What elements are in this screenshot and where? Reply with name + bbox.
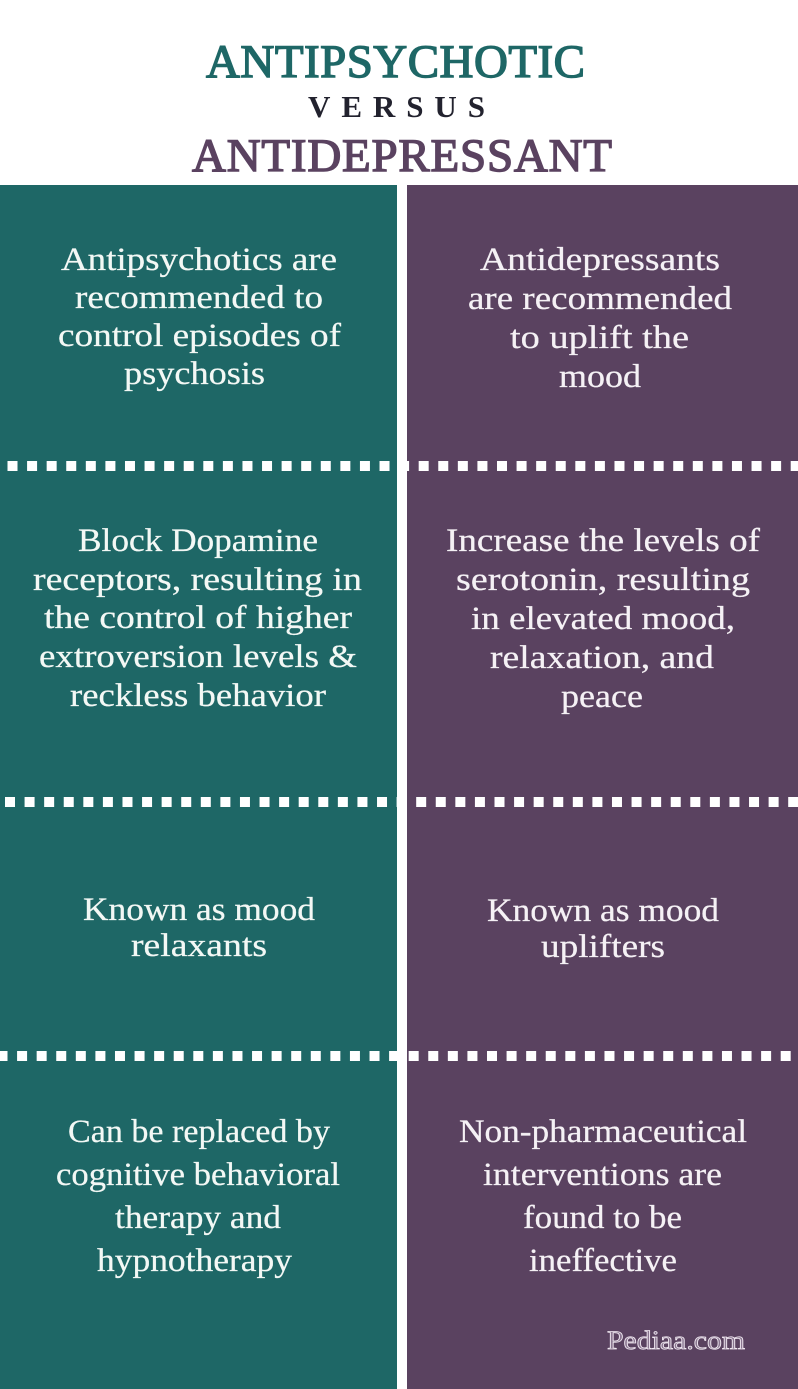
antidepressant: use: mood: [559, 359, 642, 395]
antidepressant: alternatives: found to be: [523, 1200, 682, 1236]
antidepressant: alternatives: interventions are: [483, 1157, 722, 1193]
antipsychotic: alternatives: Can be replaced by: [68, 1114, 331, 1150]
antipsychotic: mechanism: extroversion levels &: [39, 639, 357, 675]
antipsychotic: mechanism: receptors, resulting in: [33, 562, 362, 598]
antipsychotic: mechanism: [33, 523, 362, 714]
antidepressant: alternatives: [459, 1114, 747, 1279]
antidepressant: known as: uplifters: [541, 929, 665, 965]
antipsychotic: use: recommended to: [75, 280, 323, 316]
antipsychotic: alternatives: [56, 1114, 340, 1279]
title: versus: VERSUS: [308, 89, 485, 124]
antipsychotic: use: Antipsychotics are: [61, 242, 337, 278]
antidepressant: mechanism: Increase the levels of: [446, 523, 760, 559]
antidepressant: alternatives: Non-pharmaceutical: [459, 1114, 747, 1150]
antidepressant: alternatives: ineffective: [529, 1243, 677, 1279]
antidepressant: use: are recommended: [468, 281, 733, 317]
antipsychotic: known as: relaxants: [131, 928, 267, 964]
antipsychotic: known as: [83, 892, 316, 964]
title: antipsychotic: ANTIPSYCHOTIC: [206, 36, 585, 88]
antipsychotic: use: psychosis: [124, 356, 265, 392]
panel: antipsychotic column: [0, 185, 397, 1389]
antipsychotic: mechanism: the control of higher: [44, 600, 352, 636]
antidepressant: mechanism: [446, 523, 760, 715]
title: antidepressant: ANTIDEPRESSANT: [192, 130, 612, 182]
antipsychotic: mechanism: Block Dopamine: [78, 523, 318, 559]
antipsychotic: known as: Known as mood: [83, 892, 316, 928]
antipsychotic: use: [58, 242, 341, 392]
antidepressant: use: [468, 242, 733, 395]
antidepressant: use: to uplift the: [510, 320, 689, 356]
source credit: Pediaa.com: Pediaa.com: [607, 1326, 745, 1355]
antidepressant: mechanism: relaxation, and: [490, 640, 715, 676]
antipsychotic: mechanism: reckless behavior: [70, 678, 326, 714]
antidepressant: mechanism: peace: [561, 679, 643, 715]
antidepressant: use: Antidepressants: [480, 242, 720, 278]
antidepressant: mechanism: in elevated mood,: [471, 601, 735, 637]
antipsychotic: alternatives: hypnotherapy: [97, 1243, 293, 1279]
antidepressant: known as: [487, 893, 720, 965]
antipsychotic: alternatives: cognitive behavioral: [56, 1157, 340, 1193]
antidepressant: mechanism: serotonin, resulting: [456, 562, 750, 598]
title block: [192, 36, 612, 182]
panel: antidepressant column: [407, 185, 798, 1389]
antipsychotic: use: control episodes of: [58, 318, 341, 354]
antidepressant: known as: Known as mood: [487, 893, 720, 929]
antipsychotic: alternatives: therapy and: [115, 1200, 282, 1236]
